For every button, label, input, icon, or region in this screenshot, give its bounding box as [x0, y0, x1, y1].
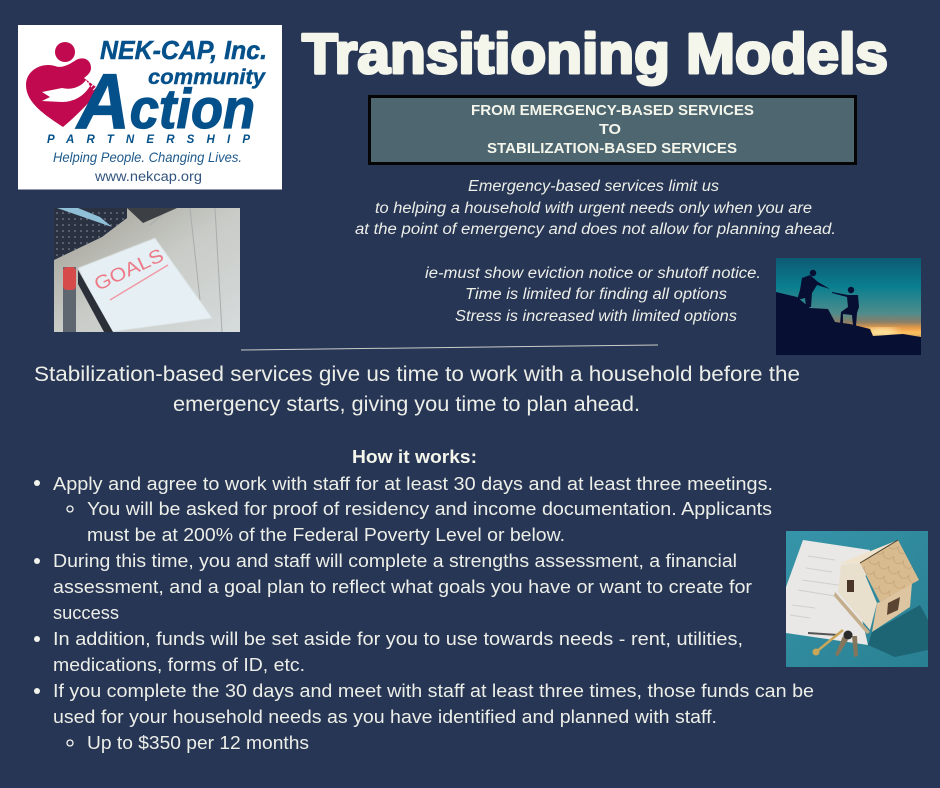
list: how it works steps: If you complete the 30 days and meet with staff at least three times, those funds can be [53, 680, 814, 701]
logo text: tagline: Helping People. Changing Lives. [53, 149, 242, 165]
text block: emergency-based services: Emergency-based services limit us [468, 178, 719, 195]
logo text: website: www.nekcap.org [94, 169, 202, 184]
list: how it works steps: In addition, funds will be set aside for you to use towards needs - rent, utilities, [53, 628, 743, 649]
list: how it works steps: used for your household needs as you have identified and planned with staff. [53, 706, 717, 727]
text block: eviction and stress notes [425, 265, 761, 325]
text block: emergency-based services: at the point of emergency and does not allow for planning ahead. [355, 221, 836, 238]
photo: model house with keys on documents [786, 531, 928, 667]
text block: stabilization-based services: Stabilization-based services give us time to work with a household before the [34, 362, 800, 386]
list: how it works steps: During this time, you and staff will complete a strengths assessment, a financial [53, 550, 737, 571]
banner line 2: TO [599, 121, 621, 138]
logo text: Partnership: PARTNERSHIP [47, 134, 250, 146]
photo: silhouettes helping on a hill at sunset [776, 258, 921, 355]
text block: emergency-based services: to helping a household with urgent needs only when you are [375, 200, 812, 217]
subtitle banner [370, 96, 856, 164]
text block: eviction and stress notes: Stress is increased with limited options [455, 308, 737, 325]
photo: goals notebook [54, 208, 240, 332]
photo text: goals: GOALS [91, 245, 167, 296]
logo: NEK-CAP community action partnership [18, 25, 282, 190]
icon: heart with embracing arm [26, 42, 101, 127]
logo text: Action: Action [75, 57, 255, 145]
text block: stabilization-based services: emergency starts, giving you time to plan ahead. [173, 392, 640, 416]
list: how it works steps [34, 473, 814, 753]
text block: stabilization-based services [34, 362, 800, 416]
list: how it works steps: Up to $350 per 12 months [87, 732, 309, 753]
list: how it works steps: medications, forms of ID, etc. [53, 654, 305, 675]
list: how it works steps: You will be asked for proof of residency and income documentation. Applicants [87, 498, 772, 519]
banner line 1: FROM EMERGENCY-BASED SERVICES [471, 102, 754, 119]
text block: emergency-based services [355, 178, 836, 238]
list: how it works steps: must be at 200% of the Federal Poverty Level or below. [87, 524, 565, 545]
logo text: community: community [148, 65, 266, 89]
list: how it works steps: Apply and agree to work with staff for at least 30 days and at least three meetings. [53, 473, 773, 494]
list: how it works steps: success [53, 602, 119, 623]
text block: eviction and stress notes: ie-must show eviction notice or shutoff notice. [425, 265, 761, 282]
title: Transitioning Models [302, 22, 888, 86]
logo text: NEK-CAP, Inc.: NEK-CAP, Inc. [100, 35, 267, 65]
text block: eviction and stress notes: Time is limited for finding all options [465, 286, 727, 303]
divider [241, 345, 658, 350]
heading: how it works: How it works: [352, 447, 477, 467]
banner line 3: STABILIZATION-BASED SERVICES [487, 140, 737, 157]
list: how it works steps: assessment, and a goal plan to reflect what goals you have or want to create for [53, 576, 752, 597]
